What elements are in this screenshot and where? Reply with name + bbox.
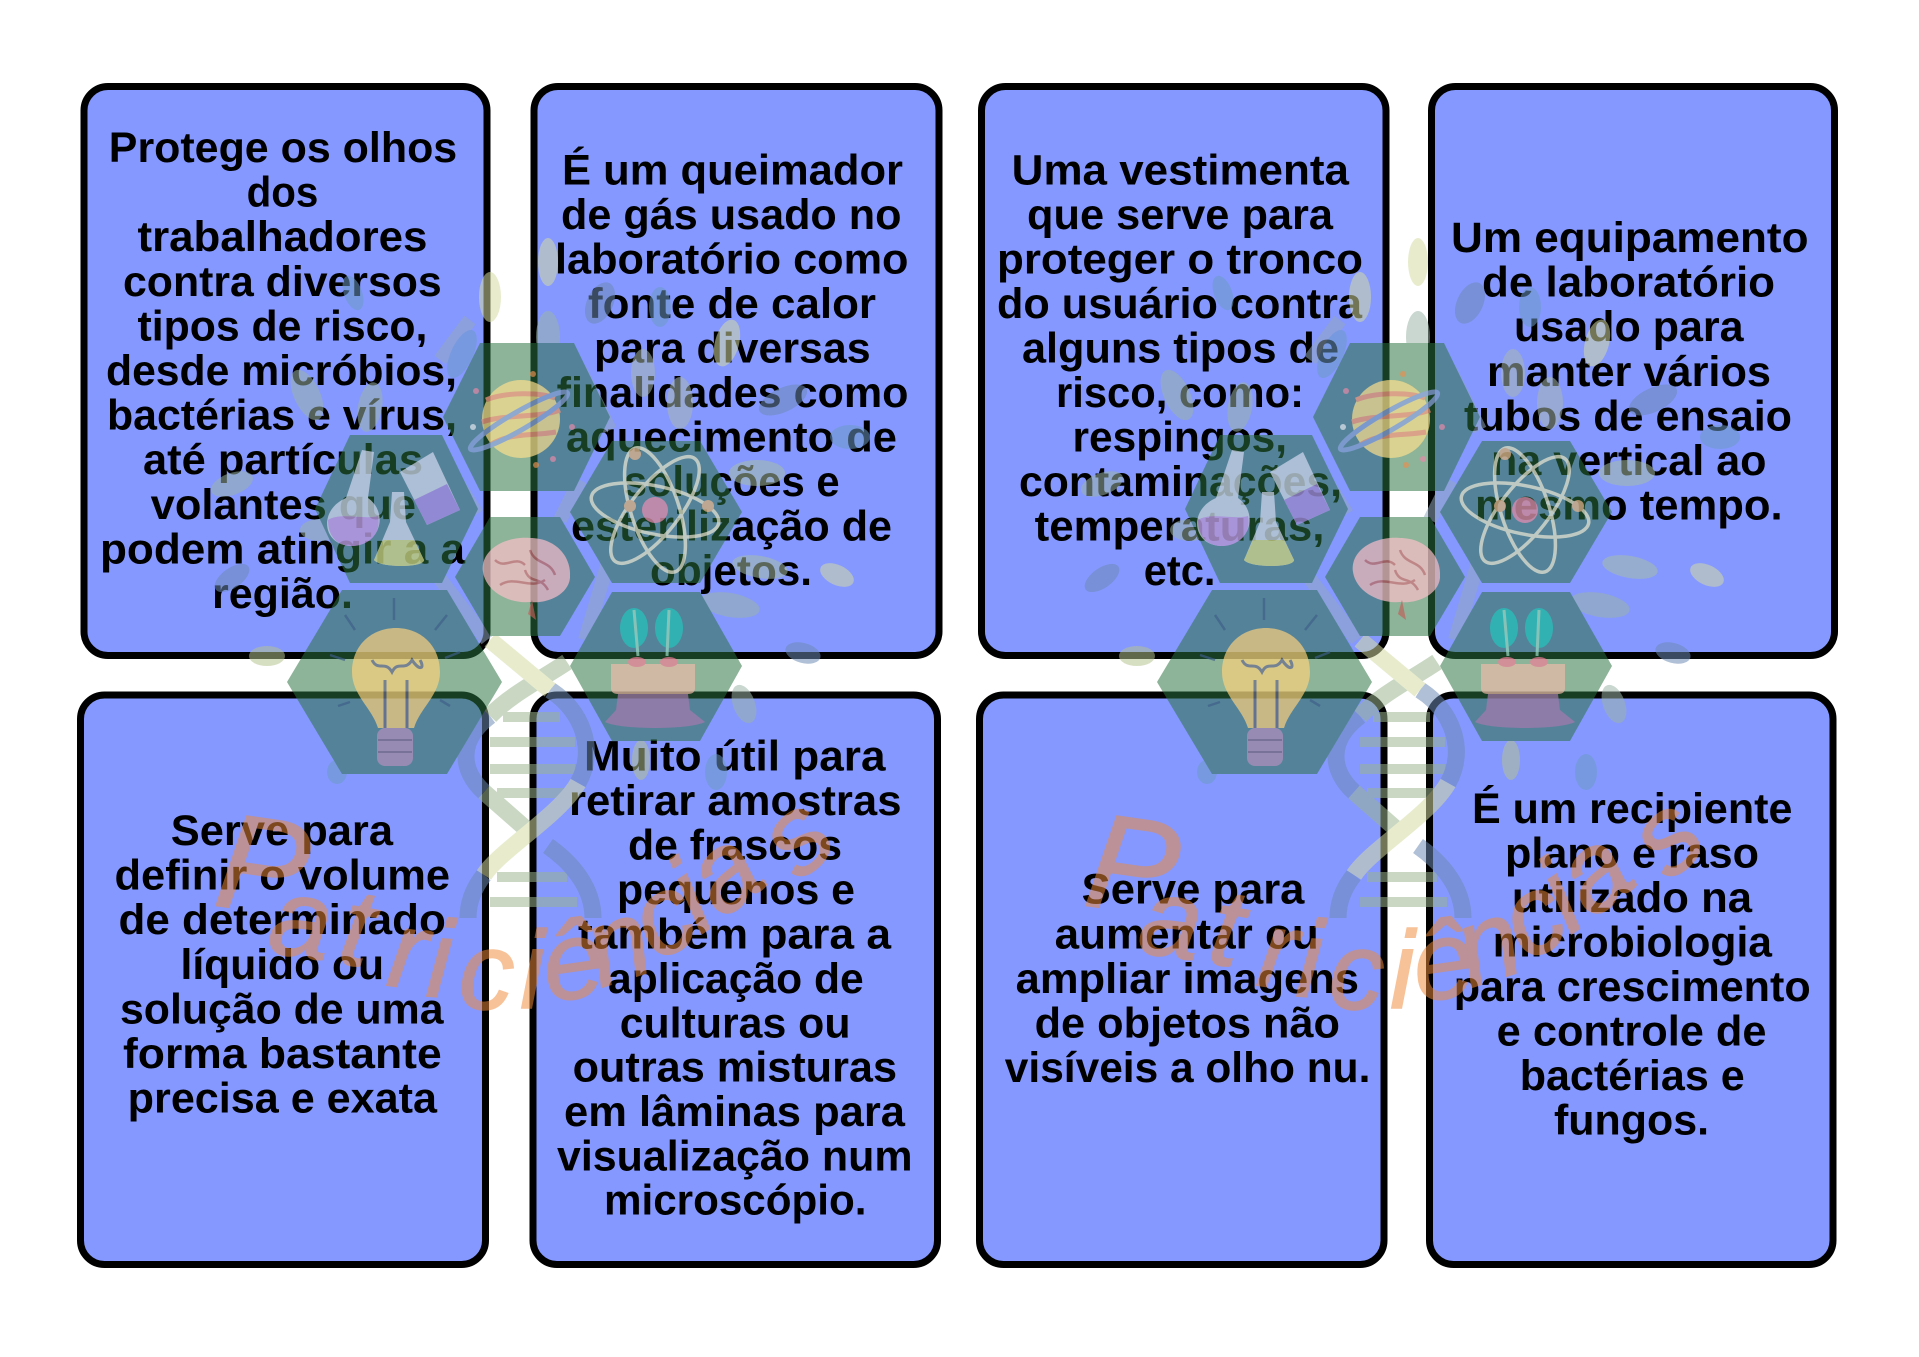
card text: test tube rack: Um equipamento <box>1451 214 1808 262</box>
card text: test tube rack <box>1451 214 1808 530</box>
card text: volumetric flask: líquido ou <box>180 941 384 989</box>
card text: goggles <box>100 124 466 618</box>
card text: test tube rack: manter vários <box>1487 348 1771 396</box>
card text: goggles: desde micróbios, <box>106 347 457 395</box>
card text: pipette: pequenos e <box>617 866 855 914</box>
card text: petri dish: e controle de <box>1497 1008 1766 1056</box>
card text: pipette: Muito útil para <box>584 733 887 781</box>
card text: pipette: outras misturas <box>573 1044 897 1092</box>
watermark icons: right set <box>1197 371 1594 766</box>
card text: pipette: aplicação de <box>608 955 864 1003</box>
card text: volumetric flask: de determinado <box>118 896 446 944</box>
card text: lab coat: proteger o tronco <box>997 236 1363 284</box>
card text: volumetric flask: forma bastante <box>123 1030 442 1078</box>
card text: pipette: em lâminas para <box>564 1088 906 1136</box>
card text: microscope: de objetos não <box>1035 1000 1340 1048</box>
panel: card pipette <box>533 695 938 1264</box>
watermark text: right Patriciências: atriciências <box>1133 772 1727 1034</box>
card text: burner: laboratório como <box>555 236 908 284</box>
card text: microscope: Serve para <box>1082 866 1305 914</box>
card text: goggles: podem atingir a a <box>100 525 466 573</box>
card text: goggles: bactérias e vírus, <box>107 392 457 440</box>
card text: volumetric flask: definir o volume <box>114 852 450 900</box>
card text: goggles: até partículas <box>143 436 423 484</box>
watermark graphic: right science tree <box>1078 238 1740 918</box>
card text: goggles: volantes que <box>151 481 416 529</box>
card text: lab coat: etc. <box>1144 547 1216 595</box>
watermark icons: left set on the hexagons <box>327 371 724 766</box>
icon: planet <box>466 371 575 468</box>
card text: petri dish: para crescimento <box>1454 963 1811 1011</box>
card text: lab coat: risco, como: <box>1056 369 1304 417</box>
panel: card bunsen burner <box>534 86 939 656</box>
card text: microscope: visíveis a olho nu. <box>1005 1044 1370 1092</box>
card text: lab coat <box>997 146 1363 595</box>
card text: goggles: região. <box>212 570 353 618</box>
hexagon: atom <box>570 441 742 583</box>
card text: test tube rack: de laboratório <box>1482 259 1775 307</box>
hexagon: brain <box>455 517 595 636</box>
leaves scattered <box>208 238 870 790</box>
card text: burner: para diversas <box>594 324 871 372</box>
hexagon: planet <box>443 343 610 491</box>
card text: lab coat: respingos, <box>1072 414 1287 462</box>
card text: burner: aquecimento de <box>566 414 897 462</box>
card text: microscope <box>1005 866 1370 1092</box>
icon: potted plant <box>605 608 705 728</box>
card text: lab coat: que serve para <box>1027 191 1334 239</box>
card text: pipette: também para a <box>578 910 892 958</box>
card text: goggles: dos <box>247 169 318 217</box>
icon: DNA helix <box>466 640 593 918</box>
panel: card test tube rack <box>1432 86 1834 656</box>
card text: volumetric flask <box>114 807 450 1123</box>
panel: card volumetric flask <box>80 695 486 1264</box>
card text: burner: fonte de calor <box>588 280 876 328</box>
card text: lab coat: alguns tipos de <box>1022 324 1339 372</box>
card text: petri dish: É um recipiente <box>1472 785 1792 833</box>
card text: test tube rack: mesmo tempo. <box>1475 482 1783 530</box>
card text: microscope: aumentar ou <box>1055 910 1319 958</box>
card text: test tube rack: na vertical ao <box>1491 437 1766 485</box>
card text: pipette: culturas ou <box>620 999 850 1047</box>
card text: petri dish: microbiologia <box>1493 918 1773 966</box>
card text: petri dish: fungos. <box>1554 1096 1709 1144</box>
card text: petri dish: utilizado na <box>1512 874 1753 922</box>
tree branches <box>437 320 610 640</box>
card text: burner: objetos. <box>650 547 812 595</box>
card text: lab coat: temperaturas, <box>1035 502 1324 550</box>
watermark text: left Patriciências: P <box>208 784 318 946</box>
hexagon: plant <box>570 592 742 741</box>
card text: petri dish: plano e raso <box>1505 830 1759 878</box>
card text: goggles: contra diversos <box>123 258 442 306</box>
panel: card safety goggles <box>84 86 487 656</box>
card text: burner: É um queimador <box>562 146 903 194</box>
card text: volumetric flask: Serve para <box>171 807 394 855</box>
icon: light bulb <box>330 598 460 766</box>
card text: pipette: visualização num <box>557 1133 912 1181</box>
card text: pipette: microscópio. <box>604 1177 866 1225</box>
card text: petri dish <box>1454 785 1811 1144</box>
card text: microscope: ampliar imagens <box>1016 955 1359 1003</box>
card text: lab coat: contaminações, <box>1019 458 1342 506</box>
icon: brain <box>483 538 570 620</box>
card text: pipette <box>557 733 912 1225</box>
card text: test tube rack: tubos de ensaio <box>1464 392 1792 440</box>
card text: burner: finalidades como <box>557 369 908 417</box>
card text: burner: esterilização de <box>571 502 892 550</box>
card text: goggles: Protege os olhos <box>109 124 457 172</box>
card text: burner: soluções e <box>624 458 840 506</box>
card text: volumetric flask: precisa e exata <box>128 1075 438 1123</box>
card text: burner <box>555 146 908 595</box>
card text: lab coat: do usuário contra <box>997 280 1363 328</box>
watermark text: left Patriciências: atriciências <box>263 772 857 1034</box>
card text: pipette: retirar amostras <box>569 777 902 825</box>
panel: card petri dish <box>1430 695 1833 1264</box>
card text: goggles: tipos de risco, <box>138 302 427 350</box>
card text: test tube rack: usado para <box>1514 303 1745 351</box>
card text: goggles: trabalhadores <box>138 213 427 261</box>
hexagon: flasks <box>315 435 478 583</box>
card text: volumetric flask: solução de uma <box>120 985 445 1033</box>
card text: petri dish: bactérias e <box>1520 1052 1745 1100</box>
watermark text: right Patriciências: P <box>1078 784 1188 946</box>
card text: lab coat: Uma vestimenta <box>1012 146 1350 194</box>
icon: flasks <box>327 450 460 566</box>
hexagon: light bulb <box>287 590 502 774</box>
card text: burner: de gás usado no <box>561 191 902 239</box>
panel: card lab coat <box>982 86 1386 656</box>
card text: pipette: de frascos <box>628 822 842 870</box>
panel: card microscope <box>980 695 1384 1264</box>
icon: atom <box>586 441 724 579</box>
watermark graphic: left science tree with hexagons, DNA and leaves <box>208 238 870 918</box>
